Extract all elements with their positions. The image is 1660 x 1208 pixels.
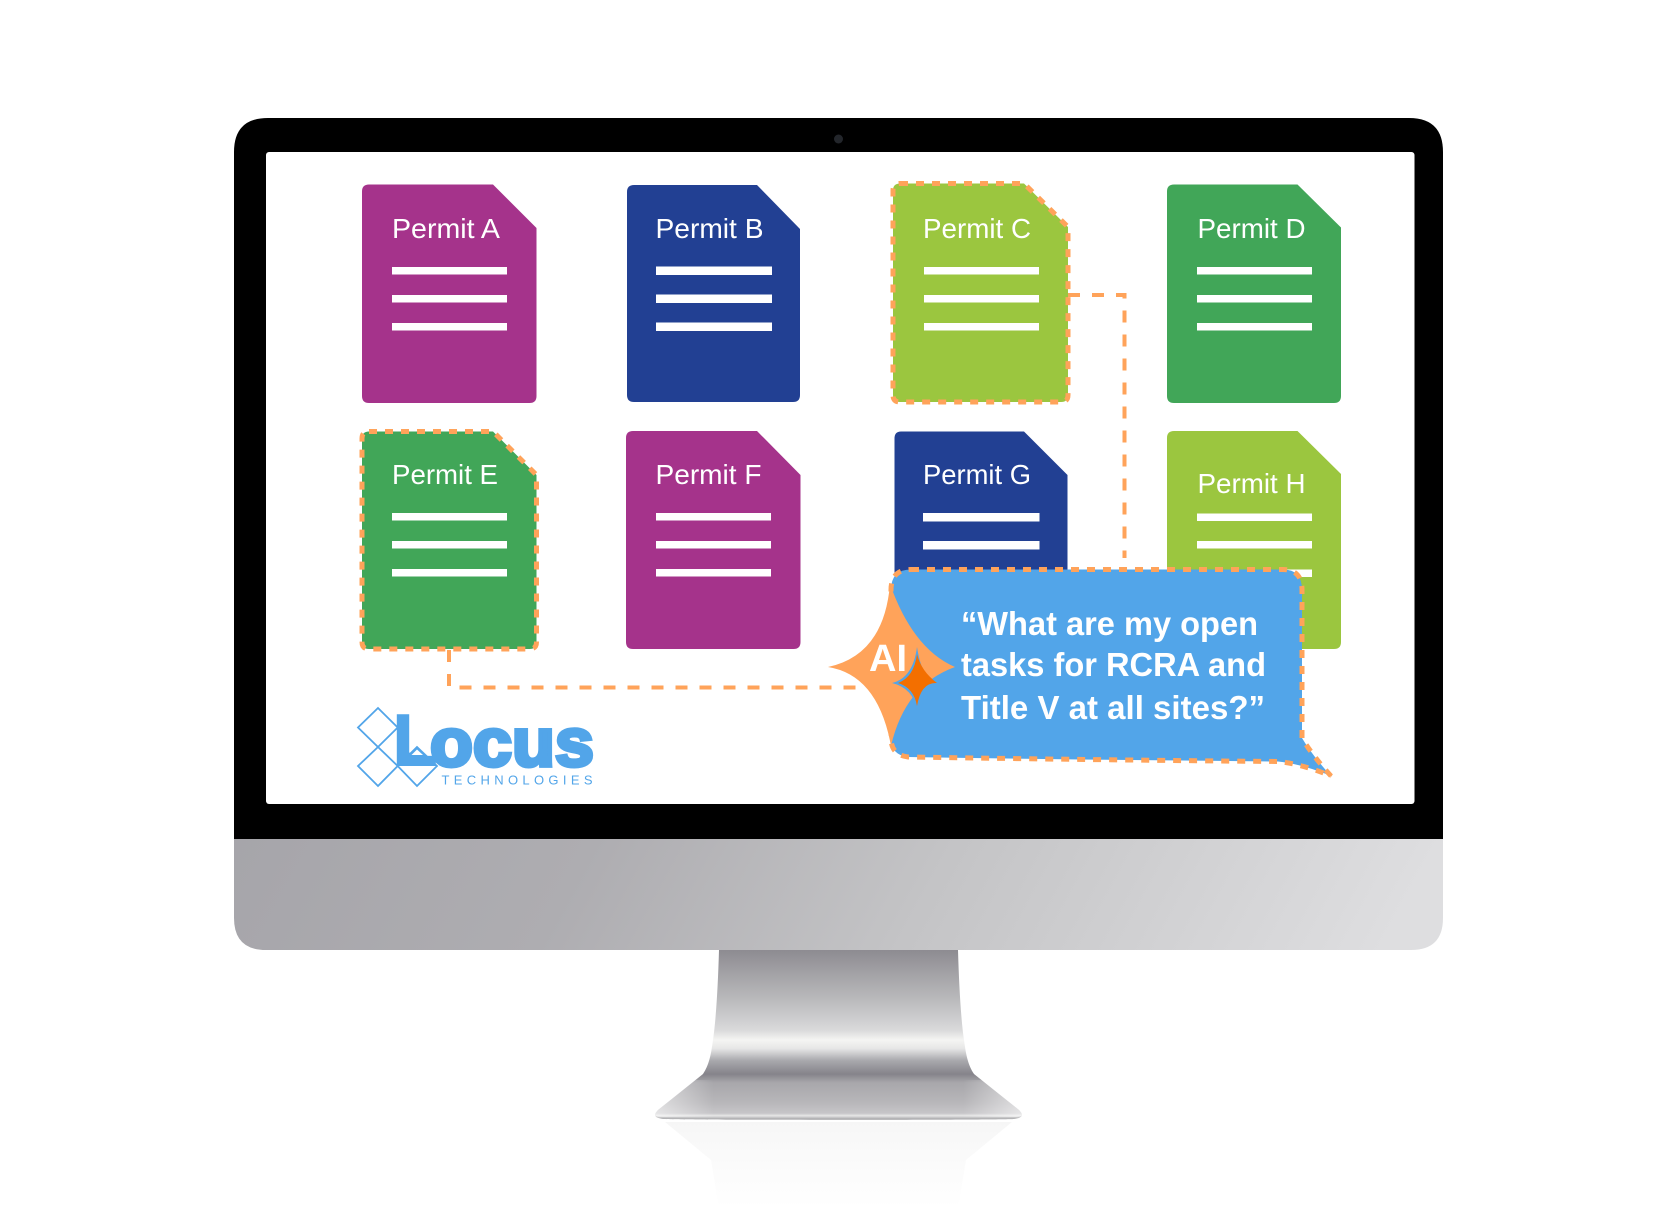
logo diamonds: [358, 708, 437, 786]
document: Permit F: Permit F: [656, 459, 762, 490]
document: Permit G: [894, 432, 1068, 642]
document: Permit H: Permit H: [1198, 468, 1306, 499]
document: Permit A: [362, 184, 536, 403]
Locus Technologies logo: [358, 701, 594, 788]
document: Permit H: [1167, 431, 1341, 649]
icon: AI sparkle: [828, 584, 955, 746]
AI label: AI: [869, 638, 907, 680]
document: Permit C, highlighted: Permit C: [923, 213, 1031, 244]
logo wordmark: ocus: [430, 705, 594, 781]
logo wordmark: L: [393, 701, 437, 781]
prompt text: “What are my open: [961, 606, 1258, 643]
stand reflection: [665, 1122, 1012, 1208]
prompt text: tasks for RCRA and: [961, 647, 1266, 684]
connector: Permit E to AI prompt: [449, 650, 866, 688]
document: Permit B: Permit B: [656, 213, 764, 244]
small sparkle: [892, 647, 937, 710]
document: Permit D: [1167, 184, 1341, 403]
logo tagline: TECHNOLOGIES: [442, 772, 593, 788]
connector: Permit C to AI prompt: [1068, 295, 1124, 558]
document: Permit A: Permit A: [392, 213, 501, 244]
document: Permit E, highlighted: [362, 432, 536, 649]
webcam: [834, 134, 843, 144]
document: Permit D: Permit D: [1198, 213, 1306, 244]
AI prompt speech bubble: [891, 570, 1331, 776]
document: Permit G: Permit G: [923, 459, 1031, 490]
screen: [266, 152, 1414, 804]
document: Permit B: [627, 185, 800, 402]
prompt text: [961, 606, 1266, 727]
monitor stand: [655, 950, 1022, 1120]
prompt text: Title V at all sites?”: [961, 690, 1265, 727]
document: Permit C, highlighted: [893, 184, 1068, 402]
logo L foot: [398, 746, 437, 766]
document: Permit E, highlighted: Permit E: [392, 459, 498, 490]
document: Permit F: [626, 431, 800, 649]
monitor bezel: [234, 118, 1443, 839]
monitor chin: [234, 839, 1443, 950]
